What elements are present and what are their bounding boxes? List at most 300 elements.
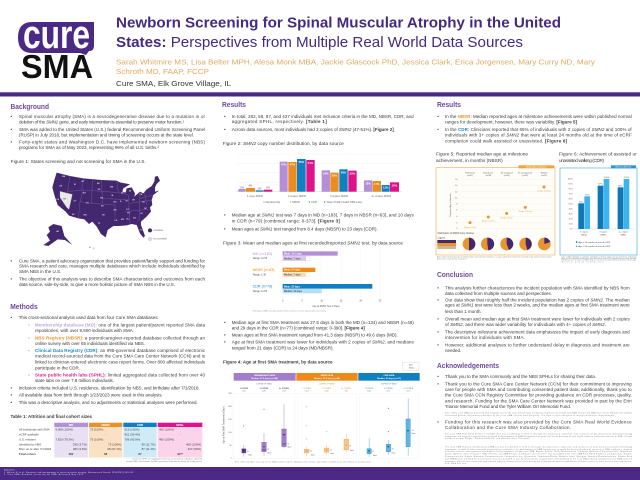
figure 3: horizontal bar chart: Range: 0-373 xyxy=(253,291,268,293)
figure 4: box plots: Mean xyxy=(412,433,416,435)
figure 5: milestone chart: 12 xyxy=(455,191,457,193)
authors xyxy=(116,57,595,76)
figure 1 title: Figure 1: States screening and not screening for SMA in the U.S. xyxy=(11,159,146,164)
text block: results bullets xyxy=(224,114,414,132)
figure 4: box plots: 2 COPIES xyxy=(302,388,312,390)
figure 2: bar chart: State Public Health NBS Labs xyxy=(327,200,363,204)
figure 1: US map: MS xyxy=(121,219,124,221)
figure 3: horizontal bar chart: Mean: 8.4 days xyxy=(284,269,301,272)
figure 1: US map: ND xyxy=(97,183,100,185)
title xyxy=(116,14,561,51)
figure 6: walking bar chart: 10% xyxy=(569,224,573,226)
figure 4: box plots: COPIES OF SMN2 xyxy=(381,383,396,385)
heading: background: Background xyxy=(10,102,49,111)
figure 2: bar chart: 54% xyxy=(308,161,314,165)
figure 2: bar chart: 47% xyxy=(290,163,296,167)
text block: methods bullets: • xyxy=(10,315,12,320)
text block: background bullets: • xyxy=(10,127,12,132)
text block: methods bullets: State public health labs (SPHL): limited aggregated data collected from over 40 xyxy=(35,372,205,377)
figure 1: US map: CA xyxy=(56,198,60,201)
figure 6: walking bar chart: 84% xyxy=(618,185,623,187)
text block: acknowledgement bullets: Funding for this research was also provided by the Cure SMA Real World Evidence xyxy=(445,419,632,424)
text block: methods bullets: ◦ xyxy=(28,348,30,353)
text block: treatment age bullets: • xyxy=(224,320,226,325)
figure 4: box plots: 3 COPIES xyxy=(260,388,269,390)
text block: NBSR and CDR bullets xyxy=(437,114,632,143)
figure 4: box plots: n=27 xyxy=(386,391,390,393)
figure 4: box plots: Median xyxy=(409,368,414,370)
text block: methods bullets: linked to clinician-entered electronic case report forms. Over 800 affected individuals xyxy=(35,359,206,364)
figure 4: box plots: 250 xyxy=(228,393,233,395)
figure 4: box plots: n=23 xyxy=(305,391,309,393)
text block: methods bullets: All available data from birth through 1/23/2023 were used in this analysis. xyxy=(19,393,163,398)
figure 4: box plots: Mean xyxy=(373,455,377,457)
figure 2: bar chart xyxy=(237,154,402,204)
text block: NBSR and CDR bullets: In the NBSR: Median reported ages at milestone achievements were within published normal xyxy=(445,114,632,119)
figure 4: box plots: Mean xyxy=(350,450,354,452)
text block: acknowledgement bullets: Pharmaceuticals, Biogen, Biohaven Pharmaceuticals, Cytokinetics Inc., Genentech, Genentech/Roche, Novartis Gene Therapies, Novartis Pharmaceuticals, Scholar Rock xyxy=(445,455,632,458)
figure 4: box plots: n=10 xyxy=(406,391,410,393)
figure 4: box plots: 24 xyxy=(247,451,249,453)
figure 2: bar chart: 1 copy SMN2 xyxy=(247,194,263,198)
table 1: attrition: 75 (100%) xyxy=(108,442,122,446)
figure 2: bar chart: 2% xyxy=(240,185,245,189)
text block: background bullets: (RUSP) in July 2018, but implementation and timing of screening occurs at the state level. xyxy=(19,132,194,138)
heading: acknowledgements: Acknowledgements xyxy=(437,361,499,370)
figure 5: milestone chart: Rolled over xyxy=(483,171,494,174)
figure 4: box plots: 28 xyxy=(267,449,269,451)
figure 1: US map: NC xyxy=(144,208,148,210)
text block: conclusion bullets: Overall mean and median age at first SMA treatment were lower for individuals with 2 copies xyxy=(445,316,630,321)
figure 5: milestone chart: Range: 9-19 mo xyxy=(537,190,551,192)
text block: methods bullets: online survey with over 65 individuals identified via NBS. xyxy=(35,341,145,346)
figure 4: box plots: 150 xyxy=(228,419,233,421)
figure 5: milestone chart: (n=36) xyxy=(504,175,510,177)
text block: results bullets: Across data sources, most individuals had 2 copies of SMN2 (47-51%). [Figure 2] xyxy=(232,127,394,132)
affiliation: Cure SMA, Elk Grove Village, IL xyxy=(116,79,231,88)
figure 1: US map: SD xyxy=(98,189,101,191)
figure 1: US map xyxy=(43,173,168,249)
text block: conclusion bullets: data collected from multiple sources and perspectives. xyxy=(445,291,552,296)
text block: acknowledgement bullets: • xyxy=(437,381,439,386)
figure 4: box plots: 24 xyxy=(310,451,312,453)
figure 4: box plots: 3 COPIES xyxy=(384,388,393,390)
figure 4: box plots: Mean xyxy=(287,446,291,448)
text block: acknowledgement bullets: programs, clinical care initiatives and related registry infrastructure costs during the study period and for publication of these results in their current form and format. xyxy=(445,460,632,463)
figure 1: US map: MO xyxy=(113,202,117,204)
text block: conclusion bullets: • xyxy=(437,297,439,302)
text block: methods bullets xyxy=(10,315,206,405)
figure 3 title: Figure 3: Mean and median ages at first recorded/reported SMN1 test, by data source xyxy=(223,241,403,246)
figure 4: box plots: n=16 xyxy=(325,391,329,393)
table 1: attrition: 861 (99.4%) xyxy=(124,432,140,436)
figure 1: US map: IN xyxy=(126,201,128,203)
figure 2: bar chart: CDR xyxy=(311,200,317,204)
text block: acknowledgement bullets: • xyxy=(437,374,439,379)
text block: methods bullets: repositories, with over 9,500 individuals with SMA. xyxy=(35,328,134,333)
figure 2: bar chart: 4% xyxy=(248,183,253,187)
figure 6: walking bar chart: 2 copies xyxy=(580,232,588,234)
panel: results right xyxy=(436,100,637,263)
text block: NBSR and CDR bullets: completion could walk assisted or unassisted. [Figure 6] xyxy=(445,138,568,143)
text block: results bullets: • xyxy=(224,114,226,119)
text block: conclusion bullets: • xyxy=(437,285,439,290)
figure 5 title: Figure 5: Reported median age at milestone xyxy=(436,152,528,156)
figure 3: horizontal bar chart: 20 xyxy=(359,300,363,302)
figure 1: US map: NE xyxy=(100,197,104,199)
table 1: attrition: - xyxy=(180,432,181,436)
figure 4: box plots xyxy=(222,362,420,464)
figure 6: walking bar chart: 65% xyxy=(585,194,590,196)
figure 1: US map: AK xyxy=(56,230,60,233)
figure 5: milestone chart: Note: n=59 contributed to age at milestone data; age reported in months as a range, adjusted for milestones achieved in age and not current to data. xyxy=(437,256,553,259)
table 1: attrition: SPHL xyxy=(176,423,184,427)
figure 6: walking bar chart: Milestone data by walking status. xyxy=(562,260,606,263)
figure 1: US map: NV xyxy=(63,198,67,200)
figure 4: box plots: n=48 xyxy=(262,391,266,393)
text block: methods bullets: • xyxy=(10,385,12,390)
text block: acknowledgement bullets: Since 2019, Cure SMA has partnered with hospitals across the U.S. with the goal to improve healthcare for people with SMA. Every Cure SMA Care Center Network site submits xyxy=(445,412,632,415)
text block: treatment age bullets: • xyxy=(224,333,226,338)
table 1: attrition: 282 (3.6%) xyxy=(73,447,87,451)
figure 4: box plots: 2 COPIES xyxy=(240,388,249,390)
figure 2: bar chart: 36% xyxy=(341,170,347,174)
table 1: attrition: - xyxy=(71,432,72,436)
figure 5: milestone chart: Range: 3-9 mo xyxy=(501,217,513,219)
figure 2: bar chart: NBSR xyxy=(292,200,300,204)
figure 5: milestone chart: Held head xyxy=(465,172,475,174)
figure 4: box plots: 4+ COPIES xyxy=(404,388,414,390)
text block: NBSR and CDR bullets: In the CDR: Clinicians reported that 65% of individuals with 2 copies of SMN2 and 100% of xyxy=(445,127,632,132)
text block: results bullets: In total, 282, 68, 87, and 427 individuals met inclusion criteria in the MD, NBSR, CDR, and xyxy=(232,114,414,119)
table 1: attrition xyxy=(19,423,202,458)
figure 1: US map: AR xyxy=(114,209,117,212)
figure 2: bar chart: 15% xyxy=(392,183,398,187)
text block: SMN1 test age bullets: • xyxy=(224,226,226,231)
text block: methods bullets: medical record-sourced data from the Cure SMA Care Center Network (CCN) and is xyxy=(35,354,206,359)
text block: background bullets: • xyxy=(10,140,12,145)
figure 4: box plots: Mean xyxy=(392,452,396,454)
figure 2: bar chart: 17% xyxy=(374,182,380,186)
figure 5: milestone chart: Range: 1-7 mo xyxy=(464,227,476,229)
figure 4: box plots: Mean xyxy=(311,454,315,456)
figure 3: horizontal bar chart: Median: 7 days xyxy=(284,275,301,277)
figure 6 title: Figure 6: Achievement of assisted or xyxy=(559,152,637,156)
figure 2: bar chart: 34% xyxy=(323,171,329,175)
figure 4: box plots: 2 COPIES xyxy=(365,388,374,390)
figure 5: milestone chart: Range: 3-11 mo xyxy=(482,220,495,222)
figure 6: walking bar chart: 30% xyxy=(569,214,573,216)
table 1: attrition: 290 (3.7%) xyxy=(73,442,87,446)
figure 5: milestone chart: Walked xyxy=(541,172,547,174)
text block: acknowledgement bullets: and SMA Europe. xyxy=(445,462,467,465)
figure 3: horizontal bar chart: Median: 7 days xyxy=(284,258,301,260)
panel: results middle xyxy=(222,100,420,464)
figure 1: US map: AZ xyxy=(72,213,75,216)
text block: methods bullets: Membership database (MD): one of the largest patient/parent reported SMA data xyxy=(35,322,205,327)
text block: acknowledgement bullets: The Cure SMA Industry Collaboration (SMA-IC) was established in 2016 to leverage the experience, expertise, and resources of pharmaceutical and biotechnology xyxy=(445,445,632,448)
text block: acknowledgement bullets: Trainor Memorial Fund and the Tyler William Orr Memorial Fund. xyxy=(445,404,571,409)
table 1: attrition: 75 (100%) xyxy=(90,437,103,441)
title: Newborn Screening for Spinal Muscular Atrophy in the United xyxy=(116,14,561,32)
logo: Cure SMA: cure xyxy=(23,13,90,57)
figure 4: box plots: 200 xyxy=(228,406,233,408)
text block: treatment age bullets xyxy=(224,320,414,350)
figure 2: bar chart: 2 copies SMN2 xyxy=(288,194,307,198)
figure 3: horizontal bar chart xyxy=(253,248,382,313)
text block: treatment age bullets: and 29 days in the CDR (n=77) [combined range: 0-390]. [Figure 4] xyxy=(232,326,365,331)
text block: objectives: SMA research and care, manages multiple databases which include individuals identified by xyxy=(19,264,206,268)
figure 5: milestone chart: Distribution of SMN2 Copy Number xyxy=(438,232,474,235)
figure 1: US map: AL xyxy=(126,217,130,220)
text block: acknowledgement bullets: The Cure SMA Real World Evidence Collaboration was established in 2021 to leverage the experience, expertise, and resources of pharmaceutical and biotechnology xyxy=(445,432,632,435)
figure 2: bar chart: Membership xyxy=(266,200,281,204)
text block: objectives xyxy=(10,258,206,287)
figure 4: box plots: 50 xyxy=(229,445,233,447)
figure 2: bar chart: 2% xyxy=(266,185,271,189)
figure 4: box plots: 100 xyxy=(228,432,233,434)
figure 4: box plots: Age at First SMA Treatment in Days xyxy=(222,406,225,443)
text block: background bullets: Forty-eight states and Washington D.C. have implemented newborn screening (NBS) xyxy=(19,140,206,145)
figure 5: milestone chart: Reported Age in Months xyxy=(449,193,452,217)
figure 1: US map: LA xyxy=(115,219,118,222)
figure 4: box plots: CDR DATA xyxy=(384,374,395,377)
figure 1: US map: CO xyxy=(86,202,89,204)
panel: acknowledgements xyxy=(437,361,632,465)
logo: Cure SMA: SMA xyxy=(21,48,93,85)
figure 5: milestone chart: 14 xyxy=(455,185,458,187)
text block: NBSR and CDR bullets: individuals with 3+ copies of SMN2 that were at least 24 months old at the time of eCRF xyxy=(445,132,632,137)
footer bar with references: 2. Cure SMA. Newborn screening for SMA. Accessed May 2023. xyxy=(4,473,84,476)
figure 1: US map: PA xyxy=(140,193,143,196)
text block: conclusion bullets: Our data show that roughly half the incident population has 2 copies of SMN2. The median xyxy=(445,297,630,302)
text block: conclusion bullets: intervention for individuals with SMA. xyxy=(445,335,525,340)
figure 4: box plots: 4+ COPIES xyxy=(279,387,290,390)
text block: acknowledgement bullets: care for people with SMA and contributing consented patient data; additionally, thank you to xyxy=(445,387,632,392)
figure 3: horizontal bar chart: Age at SMN1 Test in Days xyxy=(312,305,340,308)
figure 1: US map: WY xyxy=(83,192,87,194)
text block: conclusion bullets: needed. xyxy=(445,348,461,353)
figure 3: horizontal bar chart: CDR (n=79) xyxy=(253,284,272,288)
figure 5: milestone chart: 8 xyxy=(456,204,458,206)
figure 4: box plots: 4+ COPIES xyxy=(341,388,352,390)
figure 5: milestone chart: 16 xyxy=(455,179,458,181)
figure 6: walking bar chart: 87% xyxy=(598,184,603,186)
figure 2: bar chart: 4+ copies SMN2 xyxy=(372,194,392,198)
figure 3: horizontal bar chart: Median: 10 days xyxy=(284,291,303,293)
text block: treatment age bullets: Mean ages at first SMA treatment ranged from 41.3 days (NBSR) to 49.6 days (MD). xyxy=(232,333,398,338)
figure 4 title: Figure 4: Age at first SMA treatment, by data source xyxy=(223,360,333,365)
table 1: attrition: Identified by NBS xyxy=(19,442,41,446)
table 1: attrition: 89 (11.7%) xyxy=(142,442,156,446)
figure 4: box plots: Note: Table and Figure show age at first SMA treatment only for individuals with a known copy number; excludes those with unknown or missing values. xyxy=(235,461,372,464)
heading: methods: Methods xyxy=(10,302,38,311)
figure 1: US map: OR xyxy=(59,186,63,188)
figure 2: bar chart: 55% xyxy=(299,160,305,164)
text block: acknowledgement bullets xyxy=(437,374,632,465)
figure 5: milestone chart: 6 xyxy=(456,210,458,212)
table footnote: *Data from SPHL are aggregated and may not include all individuals identified xyxy=(132,457,202,460)
text block: conclusion bullets: This analysis further characterizes the incident population with SMA identified by NBS from xyxy=(445,285,630,290)
figure 2: bar chart: 1% xyxy=(257,187,262,191)
table 1: attrition: 75 (100%) xyxy=(90,428,103,432)
text block: methods bullets: This cross-sectional analysis used data from four Cure SMA databases: xyxy=(19,315,159,320)
figure 2: bar chart: 18% xyxy=(365,181,371,185)
figure 6 title: unassisted walking (CDR) xyxy=(559,158,604,163)
figure 2: bar chart: 47% xyxy=(281,163,287,167)
figure 4: box plots: Mean xyxy=(248,454,252,456)
figure 4: box plots: 21 xyxy=(372,451,374,453)
text block: methods bullets: state labs on over 7.8 million individuals. xyxy=(35,378,114,383)
text block: objectives: SMA NBS in the U.S. xyxy=(19,269,61,274)
figure 5: milestone chart: 10 xyxy=(455,198,458,200)
figure 5 title: achievement, in months (NBSR) xyxy=(436,158,503,163)
figure 4: box plots: n=40 xyxy=(367,391,371,393)
figure 6: walking bar chart: 70% xyxy=(569,194,573,196)
figure 4: box plots: 3 COPIES xyxy=(322,388,332,390)
title: States: Perspectives from Multiple Real World Data Sources xyxy=(116,34,523,51)
figure 1: US map: OK xyxy=(102,214,105,216)
panel: background xyxy=(10,102,206,287)
text block: NBSR and CDR bullets: • xyxy=(437,114,439,119)
text block: conclusion bullets: The descriptive milestone achievement data emphasizes the impact of early diagnosis and xyxy=(445,329,630,334)
figure 6: walking bar chart: 90% xyxy=(569,184,573,186)
table 1: attrition: 460 (100%) xyxy=(159,428,174,432)
figure 6: walking bar chart: 100% xyxy=(604,177,609,179)
text block: methods bullets: • xyxy=(10,400,12,405)
figure 4: box plots: 53 xyxy=(287,443,289,445)
figure 6: walking bar chart: 4+ copies xyxy=(619,232,628,234)
text block: background bullets xyxy=(10,114,206,150)
text block: methods bullets: This was a descriptive analysis, and no adjustments or statistical analyses were performed. xyxy=(19,400,198,405)
text block: SMN1 test age bullets: Mean ages at SMN1 test ranged from 8.4 days (NBSR) to 23 days (CDR). xyxy=(232,226,378,231)
figure 1: US map: IA xyxy=(111,194,114,197)
footer bar with references: References: xyxy=(4,470,15,472)
figure 1: US map: GA xyxy=(133,217,136,220)
figure 3: horizontal bar chart: Mean: 14.1 days xyxy=(284,252,303,255)
figure 4: box plots: Median: 27.5 days (n=48) xyxy=(314,377,340,380)
figure 6: walking bar chart: Note: eCRF completion is reported in individuals in the data source who are reported as ambulatory. xyxy=(562,255,637,258)
text block: objectives: • xyxy=(10,276,12,281)
figure 4: box plots: 78 xyxy=(412,430,413,432)
figure 1: US map: UT xyxy=(74,201,77,203)
figure 4: box plots: 39 xyxy=(349,446,351,448)
figure 2: bar chart: 12% xyxy=(383,186,389,190)
text block: conclusion bullets: ages at SMN1 test were less than 2 weeks, and the median ages at first SMA treatment were xyxy=(445,303,630,308)
figure 1: US map: NOT SCREENING xyxy=(153,239,168,241)
figure 5: milestone chart: Range: 4-10 mo xyxy=(519,211,532,213)
figure 4: box plots: 28 xyxy=(392,448,393,450)
figure 1: US map: NY xyxy=(145,188,149,190)
text block: background bullets: SMA was added to the United States (U.S.) federal Recommended Uniform Screening Panel xyxy=(19,127,205,132)
text block: background bullets: deletion of the SMN1 gene, and early intervention is essential to preserve motor function.¹ xyxy=(19,120,184,125)
figure 5: milestone chart: (n=38) xyxy=(485,175,492,177)
figure 5: milestone chart: Legend xyxy=(438,237,446,239)
table 1: attrition: All individuals with SMA xyxy=(19,428,50,432)
figure 5: milestone chart: 0 xyxy=(456,228,458,230)
text block: conclusion bullets: • xyxy=(437,342,439,347)
table 1: attrition: NBSR xyxy=(101,423,111,427)
text block: acknowledgement bullets: and research. Funding for the SMA Care Center Network was provided in part by the Erin xyxy=(445,398,632,403)
heading: conclusion: Conclusion xyxy=(437,270,473,279)
text block: methods bullets: ◦ xyxy=(28,322,30,327)
table 1: attrition: 427* xyxy=(177,452,184,456)
figure 4: box plots: 0 xyxy=(231,458,233,460)
figure 3: horizontal bar chart: NBSR (n=63) xyxy=(253,268,275,272)
text block: methods bullets: ◦ xyxy=(28,372,30,377)
figure 4: box plots: n=9 xyxy=(344,391,348,393)
text block: acknowledgement bullets: Thank you to the Cure SMA Care Center Network (CCN) for their commitment to improving xyxy=(445,381,632,386)
table 1 title: Table 1: Attrition and final cohort sizes xyxy=(10,414,92,419)
text block: objectives: Cure SMA, a patient advocacy organization that provides patient/family support and funding for xyxy=(19,258,206,263)
figure 3: horizontal bar chart: Range: 0-273 xyxy=(253,258,268,260)
text block: acknowledgement bullets: and SMA Europe. Funding for this research was also provided in part by other partner organizations and members of the Cure SMA Industry Collaboration for SMA research xyxy=(445,457,632,460)
figure 4: box plots: Median: 27.5 days (n=134) xyxy=(251,377,278,380)
figure 1: US map: MN xyxy=(110,186,114,188)
table 1: attrition: 282 xyxy=(69,452,74,456)
table 1: attrition: 460 (100%) xyxy=(186,442,201,446)
figure 3: horizontal bar chart: Mean: 23 days xyxy=(284,286,301,288)
figure 1: US map: IL xyxy=(120,201,123,203)
footer bar with references: 1. Mercuri E, et al. Diagnosis and management of spinal muscular atrophy. Neuromuscul Disord. 2018;28(2):103-115. xyxy=(4,471,134,474)
figure 6: walking bar chart xyxy=(560,165,637,263)
table 1: attrition: Born on or after 7/1/2018 xyxy=(19,447,52,451)
text block: background bullets: programs for SMA as of May 2023, representing 99% of all U.S. births.² xyxy=(19,145,160,150)
text block: acknowledgement bullets: companies and nonprofit organizations involved in development of SMA therapeutics to guide the future direction of real world evidence collection and use in SMA. Current xyxy=(445,435,632,438)
figure 6 title xyxy=(559,152,637,163)
figure 1: US map: SC xyxy=(140,213,144,215)
text block: conclusion bullets: less than 1 month. xyxy=(445,309,482,314)
panel: conclusion xyxy=(437,270,630,353)
text block: acknowledgement bullets: Roche, Astellas Gene Therapies, NMD Pharma, and SMA Europe. Funding for this research was provided by the Cure SMA Real World Evidence Collaboration, Biogen, xyxy=(445,453,632,456)
table 1: attrition: Final cohort xyxy=(19,452,36,456)
text block: methods bullets: Clinical Data Registry (CDR): an IRB-governed database comprised of electronic xyxy=(35,348,206,353)
text block: results bullets: • xyxy=(224,127,226,132)
text block: background bullets: • xyxy=(10,114,12,119)
figure 1: US map: SCREENING xyxy=(153,230,164,232)
table 1: attrition: 7,820 (78.3%) xyxy=(56,437,74,441)
figure 3: horizontal bar chart: MD (n=183) xyxy=(253,252,272,256)
table 1: attrition: CDR xyxy=(137,423,144,427)
figure 1: US map: OH xyxy=(132,200,135,202)
text block: SMN1 test age bullets: in CDR (n=79) [combined range: 0-373]. [Figure 3] xyxy=(232,218,340,223)
figure 6: walking bar chart: 20% xyxy=(569,219,573,221)
text block: acknowledgement bullets: Thank you to the SMA community and the NBS SPHLs for sharing their data. xyxy=(445,374,596,379)
figure 1: US map: WI xyxy=(121,192,124,194)
figure 4: box plots: Median: 29 days (n=77) xyxy=(377,378,401,380)
figure 4: box plots: NBSR DATA xyxy=(321,374,334,377)
table 1: attrition: 68 (97.1%) xyxy=(107,447,122,451)
figure 5: milestone chart: (n=12) xyxy=(541,175,547,177)
text block: objectives: data source, side-by-side, to give a more holistic picture of SMA NBS in the U.S. xyxy=(19,282,175,287)
figure 1: US map: WA xyxy=(62,175,66,178)
text block: acknowledgement bullets: companies, as well as other nonprofit organizations involved in the development of SMA therapeutics to guide the future direction of research in SMA, address a range of xyxy=(445,448,632,451)
text block: NBSR and CDR bullets: ranges for development; however, there was variability. [Figure 5] xyxy=(445,119,578,124)
text block: conclusion bullets xyxy=(437,285,630,353)
table 1: attrition: eCRF available xyxy=(19,432,39,436)
figure 5: milestone chart: Median Age at Milestone xyxy=(526,166,546,169)
text block: acknowledgement bullets: the Cure SMA CCN Registry Committee for providing guidance on CDR processes, quality, xyxy=(445,393,632,398)
figure 5: milestone chart: Sit unsupported xyxy=(518,171,532,174)
figure 5: milestone chart: Milestones reported by caregivers xyxy=(437,258,467,261)
figure 6: walking bar chart: Individuals with 2 copies of SMN2 may not yet have reached walking milestones at this age. xyxy=(562,259,637,262)
figure 4: box plots: COPIES OF SMN2 xyxy=(256,383,272,385)
table 1: attrition: U.S. resident xyxy=(19,437,36,441)
figure 2: bar chart: 30% xyxy=(332,174,338,178)
text block: NBSR and CDR bullets: • xyxy=(437,127,439,132)
footer bar with references xyxy=(0,467,640,480)
text block: methods bullets: Inclusion criteria included U.S. residence, identification by NBS, and birthdate after 7/1/2018. xyxy=(19,385,200,390)
